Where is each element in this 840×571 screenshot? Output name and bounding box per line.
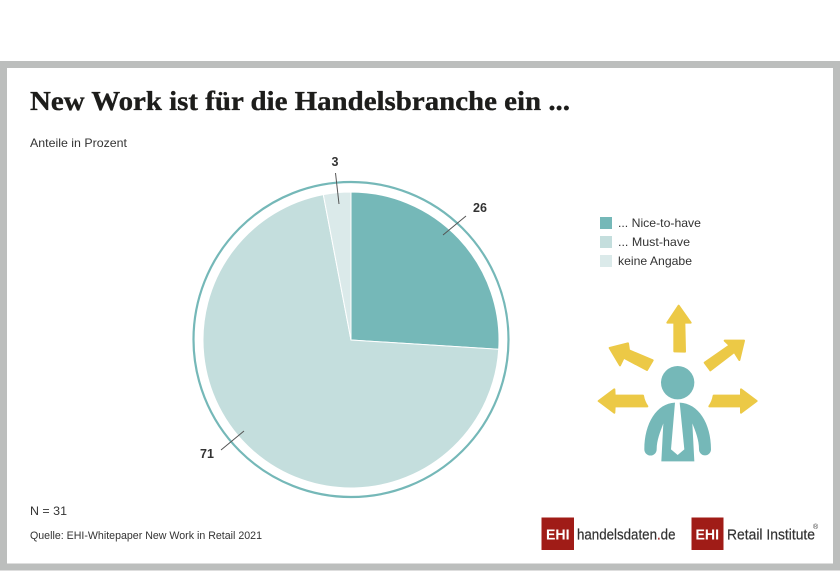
value label: 26 <box>443 201 487 235</box>
slice: Must-have 71 <box>203 195 499 488</box>
arrow: upper left <box>610 343 653 370</box>
logo: EHI Retail Institute: ® <box>813 523 819 531</box>
value label: 3 <box>332 155 339 204</box>
value label: 26: 26 <box>473 201 487 215</box>
source: Quelle: EHI-Whitepaper New Work in Retail 2021 <box>30 530 262 542</box>
legend <box>600 216 701 268</box>
legend item: keine Angabe: keine Angabe <box>618 254 692 268</box>
logo: EHI Retail Institute: Retail Institute <box>727 526 815 543</box>
logo: EHI handelsdaten.de: EHI <box>546 528 570 544</box>
pie chart <box>194 155 508 497</box>
person <box>644 366 711 461</box>
slice: keine Angabe 3 <box>323 192 351 340</box>
sample size: N = 31 <box>30 504 67 518</box>
arrow: upper right <box>705 341 744 370</box>
logo: EHI Retail Institute: EHI <box>696 528 719 544</box>
legend item: Nice-to-have: ... Nice-to-have <box>618 216 701 230</box>
subtitle: Anteile in Prozent <box>30 136 128 150</box>
logo: EHI handelsdaten.de <box>542 518 676 550</box>
slice: Nice-to-have 26 <box>351 192 499 349</box>
arrows group <box>599 306 757 413</box>
logo: EHI Retail Institute <box>692 518 819 550</box>
logo: EHI handelsdaten.de: handelsdaten.de <box>577 526 676 543</box>
person body <box>644 403 711 461</box>
value label: 71 <box>200 431 244 461</box>
title: New Work ist für die Handelsbranche ein ... <box>30 85 570 116</box>
arrow: up <box>667 306 691 352</box>
arrow: right <box>709 389 757 413</box>
value label: 3: 3 <box>332 155 339 169</box>
person head <box>661 366 694 399</box>
pie outer ring <box>194 182 508 497</box>
value label: 71: 71 <box>200 447 214 461</box>
legend item: Must-have: ... Must-have <box>618 235 690 249</box>
icon: person with arrows <box>599 306 757 461</box>
arrow: left <box>599 389 647 413</box>
